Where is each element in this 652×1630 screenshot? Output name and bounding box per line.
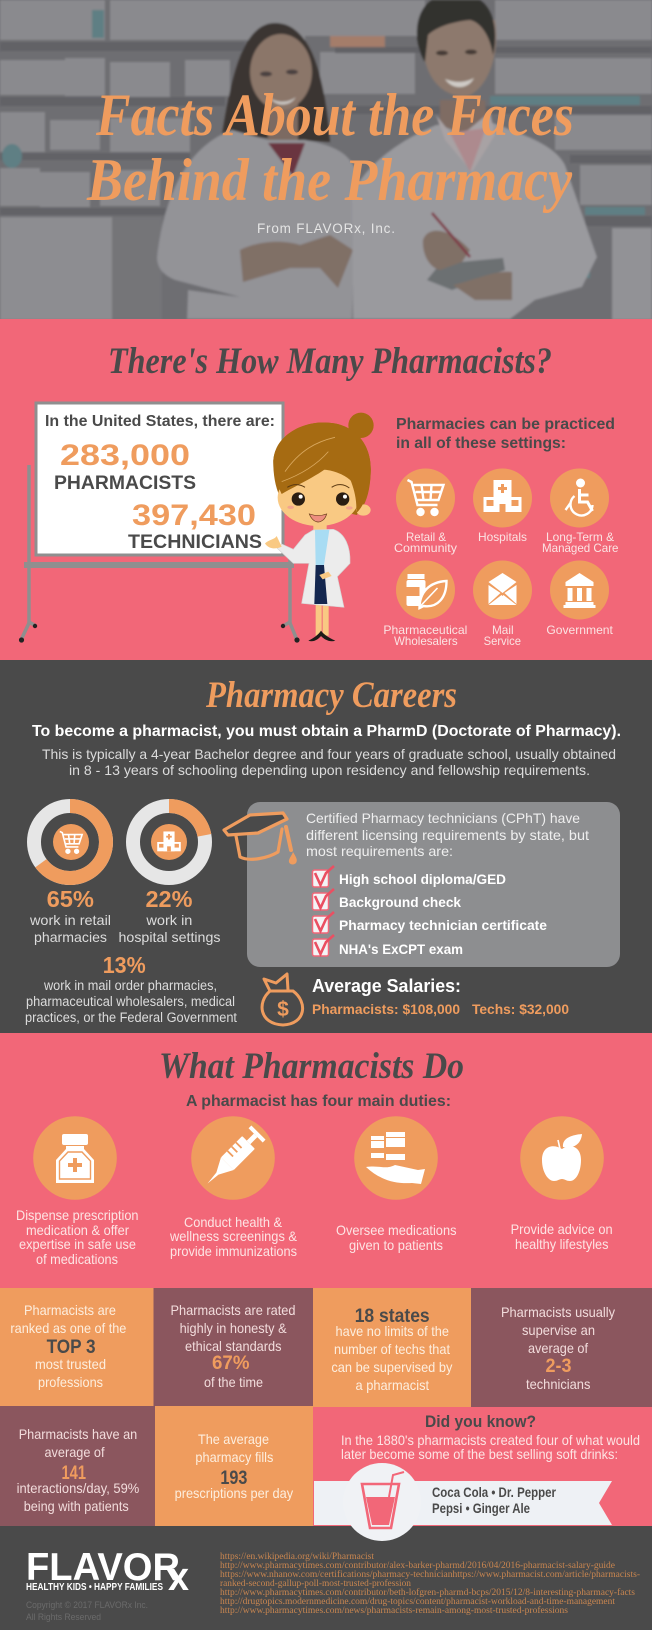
whiteboard: 283,000	[60, 439, 190, 472]
stat tile: 141 interactions: Pharmacists have an	[19, 1426, 137, 1442]
settings heading: Pharmacies can be practiced	[396, 416, 615, 433]
panel: did you know: Did you know?	[425, 1412, 536, 1431]
source links: http://drugtopics.modernmedicine.com/drug-topics/content/pharmacist-workload-and-time-management	[220, 1597, 615, 1607]
source links: http://www.pharmacytimes.com/contributor/alex-barker-pharmd/2016/04/2016-pharmacist-salary-guide	[220, 1561, 615, 1571]
ribbon with drink names: Coca Cola • Dr. Pepper	[432, 1484, 556, 1500]
panel: technician requirements: different licensing requirements by state, but	[306, 827, 589, 843]
schooling description: This is typically a 4-year Bachelor degree and four years of graduate school, usually obtained	[42, 746, 616, 762]
stat tile: supervise technicians: 2-3	[546, 1356, 572, 1377]
whiteboard: PHARMACISTS	[54, 473, 196, 494]
donut chart: 22% hospital	[118, 806, 220, 945]
stat tile: supervise technicians	[471, 1288, 652, 1407]
checklist item: ExCPT exam: NHA's ExCPT exam	[339, 941, 463, 957]
duty: dispense medication: medication & offer	[26, 1222, 129, 1238]
whiteboard	[36, 403, 283, 555]
stat tile: 193 prescriptions: prescriptions per day	[175, 1485, 293, 1501]
setting: retail and community	[394, 468, 457, 555]
duty: oversee medications: Oversee medications	[336, 1222, 456, 1238]
woman	[222, 23, 330, 142]
stat tile: top 3 profession: TOP 3	[47, 1337, 96, 1358]
title	[86, 82, 574, 213]
ribbon with drink names: Pepsi • Ginger Ale	[432, 1500, 530, 1516]
duty: oversee medications: given to patients	[349, 1237, 443, 1253]
duty: dispense medication: of medications	[36, 1251, 118, 1267]
copyright	[26, 1600, 148, 1623]
icon: hand holding bottles	[366, 1132, 425, 1184]
setting: government	[546, 560, 614, 637]
stat tile: 193 prescriptions: 193	[220, 1468, 247, 1489]
stat tile: honesty 67%: highly in honesty &	[180, 1320, 287, 1336]
setting: retail and community: Retail &	[406, 530, 446, 544]
duty: oversee medications	[336, 1116, 456, 1253]
stat tile: 141 interactions: being with patients	[24, 1498, 129, 1514]
duty: dispense medication: Dispense prescription	[16, 1207, 138, 1223]
icon: cart	[60, 831, 82, 853]
stat tile: honesty 67%: Pharmacists are rated	[170, 1302, 296, 1318]
stat tile: top 3 profession: professions	[38, 1374, 103, 1390]
duty: dispense medication	[16, 1116, 138, 1267]
checklist item: ExCPT exam	[312, 935, 463, 957]
icon: government building	[564, 573, 596, 608]
icon: medicine bottle	[56, 1134, 94, 1183]
title: Facts About the Faces	[95, 82, 574, 148]
checklist item: technician certificate	[312, 912, 547, 933]
stat tile: 18 states: number of techs that	[334, 1341, 450, 1357]
logo: FLAVORx: FLAVOR	[26, 1546, 180, 1589]
setting: long-term and managed care: Managed Care	[542, 541, 619, 555]
average salaries: Techs: $32,000	[472, 1001, 569, 1017]
source links: http://www.pharmacytimes.com/contributor/beth-lofgren-pharmd-bcps/2015/12/8-interesting-pharmacy-facts	[220, 1587, 635, 1598]
stat tile: top 3 profession: Pharmacists are	[24, 1302, 116, 1318]
stat tile: 18 states	[313, 1288, 471, 1407]
stat tile: honesty 67%	[154, 1288, 313, 1406]
duty: lifestyle advice	[511, 1116, 613, 1252]
setting: pharmaceutical wholesalers	[383, 560, 467, 648]
duty: lifestyle advice: Provide advice on	[511, 1221, 613, 1237]
duty: health screenings: wellness screenings &	[169, 1228, 298, 1244]
hero banner with pharmacist photo	[0, 0, 652, 320]
icon: pill bottle and leaf	[406, 574, 446, 608]
photo: pharmacy shelves and two pharmacists	[0, 0, 652, 320]
stat tile: honesty 67%: ethical standards	[185, 1338, 282, 1354]
setting: mail service: Service	[484, 634, 521, 648]
average salaries	[312, 976, 569, 1017]
donut chart: 65% retail: 65%	[47, 886, 94, 912]
stat: 13% other settings: work in mail order pharmacies,	[43, 978, 217, 993]
average salaries: Pharmacists: $108,000	[312, 1001, 460, 1017]
checklist item: background check: Background check	[339, 894, 461, 910]
panel: how many pharmacists	[0, 319, 652, 660]
heading: how many: There's How Many Pharmacists?	[108, 341, 552, 382]
stat tile: 141 interactions: average of	[44, 1444, 105, 1460]
stat tile: supervise technicians: Pharmacists usually	[501, 1304, 615, 1320]
source links: ranked-second-gallup-poll-most-trusted-profession	[220, 1578, 411, 1589]
stat tile: 18 states: have no limits of the	[336, 1323, 449, 1339]
subtitle: From FLAVORx, Inc.	[257, 221, 395, 236]
copyright: All Rights Reserved	[26, 1612, 101, 1623]
duty: health screenings	[169, 1116, 298, 1259]
checklist item: background check	[312, 889, 461, 910]
icon: wheelchair	[566, 478, 592, 515]
panel: what pharmacists do	[0, 1033, 652, 1288]
panel: technician requirements: most requirements are:	[306, 843, 453, 859]
setting: long-term and managed care: Long-Term &	[546, 530, 614, 544]
stat tile: honesty 67%: of the time	[204, 1374, 263, 1390]
checklist item: technician certificate: Pharmacy technician certificate	[339, 917, 547, 933]
average salaries: Average Salaries:	[312, 976, 461, 996]
icon: syringe	[200, 1125, 266, 1191]
stat tile: 193 prescriptions	[155, 1406, 313, 1526]
whiteboard: TECHNICIANS	[128, 532, 262, 553]
stat tile: top 3 profession	[0, 1288, 154, 1406]
stat: 13% other settings	[25, 952, 237, 1025]
icon: envelope	[488, 573, 516, 605]
setting: government: Government	[546, 623, 614, 637]
settings heading	[396, 416, 615, 452]
stat: 13% other settings: pharmaceutical wholesalers, medical	[26, 994, 235, 1009]
stat tile: top 3 profession: most trusted	[35, 1356, 106, 1372]
source links: https://en.wikipedia.org/wiki/Pharmacist	[220, 1552, 374, 1562]
duty: health screenings: Conduct health &	[184, 1214, 283, 1230]
ribbon with drink names	[314, 1481, 612, 1525]
setting: pharmaceutical wholesalers: Wholesalers	[394, 634, 458, 648]
setting: mail service	[473, 560, 532, 648]
setting: retail and community: Community	[394, 541, 457, 555]
setting: mail service: Mail	[492, 623, 514, 637]
heading: what pharmacists do: What Pharmacists Do	[159, 1046, 464, 1087]
setting: hospitals	[473, 468, 532, 544]
setting: hospitals: Hospitals	[478, 530, 527, 544]
donut chart: 22% hospital: 22%	[146, 886, 192, 912]
donut chart: 65% retail: work in retail	[29, 912, 111, 928]
duties intro: A pharmacist has four main duties:	[186, 1093, 451, 1110]
icon: hospital	[484, 480, 522, 512]
stat tile: top 3 profession: ranked as one of the	[10, 1320, 127, 1336]
stat tile: 18 states: 18 states	[355, 1306, 430, 1327]
man	[352, 122, 597, 319]
stat tile: 141 interactions: interactions/day, 59%	[17, 1480, 139, 1496]
PharmD statement: To become a pharmacist, you must obtain a PharmD (Doctorate of Pharmacy).	[32, 723, 621, 740]
panel: did you know	[313, 1407, 652, 1526]
stat tile: supervise technicians: average of	[528, 1340, 588, 1356]
checklist item: diploma: High school diploma/GED	[339, 871, 506, 887]
whiteboard: In the United States, there are:	[45, 413, 275, 430]
stat tile: supervise technicians: supervise an	[522, 1322, 595, 1338]
stat: 13% other settings: practices, or the Federal Government	[25, 1010, 237, 1025]
setting: long-term and managed care	[542, 468, 619, 555]
icon: apple	[542, 1134, 582, 1181]
icon: soft drink badge	[343, 1463, 421, 1541]
source links: https://www.nhanow.com/certifications/pharmacy-technicianhttps://www.pharmacist.com/article/pharmacists-	[220, 1569, 640, 1580]
icon: graduation cap	[224, 813, 297, 864]
donut chart: 65% retail: pharmacies	[34, 929, 107, 945]
icon: money bag: $	[277, 998, 289, 1021]
checklist item: diploma	[312, 866, 506, 887]
settings heading: in all of these settings:	[396, 435, 566, 452]
schooling description: in 8 - 13 years of schooling depending upon residency and fellowship requirements.	[69, 762, 590, 778]
panel: technician requirements: Certified Pharmacy technicians (CPhT) have	[306, 810, 580, 826]
panel: did you know: later become some of the best selling soft drinks:	[341, 1446, 618, 1462]
whiteboard stand	[19, 465, 300, 643]
donut chart: 22% hospital: hospital settings	[118, 929, 220, 945]
logo: FLAVORx: HEALTHY KIDS • HAPPY FAMILIES	[26, 1582, 163, 1593]
duty: lifestyle advice: healthy lifestyles	[515, 1236, 608, 1252]
stat tile: 193 prescriptions: pharmacy fills	[195, 1449, 273, 1465]
stat: 13% other settings: 13%	[103, 952, 146, 978]
icon: hospital	[157, 831, 181, 851]
stat tile: 18 states: can be supervised by	[331, 1359, 452, 1375]
donut chart: 65% retail	[29, 806, 111, 945]
schooling description	[42, 746, 616, 778]
whiteboard: 397,430	[132, 499, 256, 532]
stat tile: 193 prescriptions: The average	[198, 1431, 269, 1447]
stat tile: 18 states: a pharmacist	[356, 1377, 429, 1393]
source links: http://www.pharmacytimes.com/news/pharmacists-remain-among-most-trusted-professions	[220, 1605, 568, 1616]
copyright: Copyright © 2017 FLAVORx Inc.	[26, 1600, 148, 1611]
duty: dispense medication: expertise in safe use	[19, 1236, 136, 1252]
icon: money bag	[262, 974, 303, 1025]
panel: pharmacy careers	[0, 660, 652, 1033]
title: Behind the Pharmacy	[86, 147, 572, 213]
panel: footer	[0, 1526, 652, 1630]
stat tile: 141 interactions: 141	[62, 1463, 86, 1484]
duty: health screenings: provide immunizations	[170, 1243, 297, 1259]
setting: pharmaceutical wholesalers: Pharmaceutical	[383, 623, 467, 637]
stat tile: 141 interactions	[0, 1406, 155, 1526]
illustration: cartoon pharmacist	[265, 413, 374, 641]
source links	[220, 1552, 640, 1616]
heading: careers: Pharmacy Careers	[205, 675, 457, 716]
donut chart: 22% hospital: work in	[145, 912, 192, 928]
icon: shopping cart	[408, 480, 444, 515]
logo: FLAVORx: x	[168, 1555, 189, 1599]
stat tile: honesty 67%: 67%	[212, 1353, 250, 1374]
panel: technician requirements	[247, 802, 620, 967]
stat tile: supervise technicians: technicians	[526, 1376, 590, 1392]
